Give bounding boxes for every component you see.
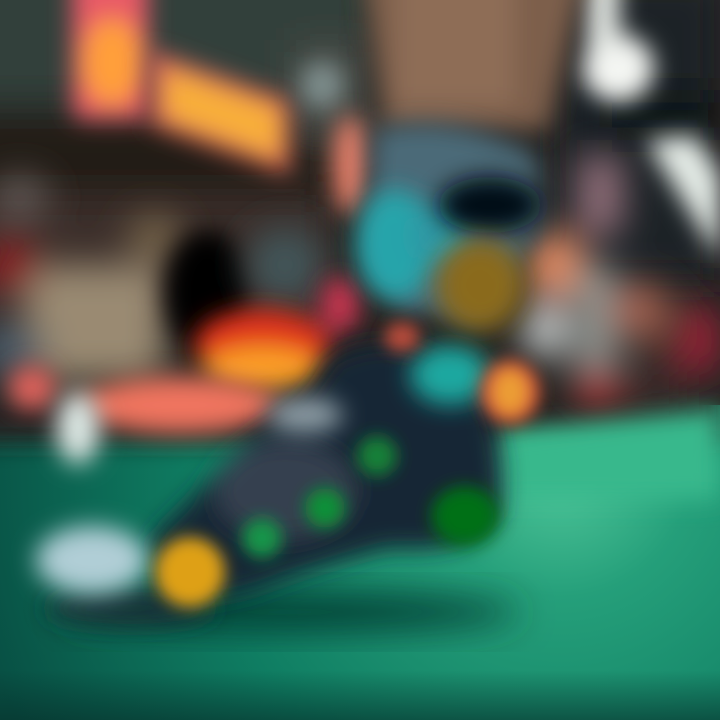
foot: red spot at ankle bbox=[384, 322, 420, 352]
background: white diagonal streak bbox=[645, 135, 720, 260]
sock: ankle and cuff bbox=[371, 124, 545, 320]
floor: shadow beneath foot bbox=[60, 594, 520, 630]
foot: yellow toe spot bbox=[155, 537, 225, 607]
sock: olive gold circle bbox=[436, 239, 524, 331]
background: upper right dark area bbox=[560, 0, 720, 280]
neon sign: yellow orange panel bbox=[150, 50, 290, 175]
background: left items on shelves bbox=[0, 174, 183, 380]
foot: pale blue toe bbox=[36, 526, 148, 594]
background: soft lower edge of shop interior bbox=[0, 0, 720, 442]
background: white light at top right bbox=[582, 0, 654, 102]
sock: pink and orange edge glow bbox=[332, 115, 368, 215]
floor: right side join with background bbox=[495, 408, 720, 500]
background: white bottle at left bbox=[56, 392, 100, 464]
vignette: darkened bottom edge bbox=[0, 670, 720, 720]
background: upper left storefront bbox=[0, 0, 370, 325]
background: pale lamp near the leg bbox=[300, 61, 344, 109]
background: teal gray shape beside black object bbox=[247, 227, 323, 303]
foot: dark area under toe bbox=[45, 592, 215, 624]
background: coral strip bbox=[8, 366, 278, 433]
foot: teal stripe near heel bbox=[410, 345, 490, 405]
foot: pale patch on top bbox=[267, 397, 343, 433]
foot: orange ball at heel bbox=[480, 360, 540, 424]
background: red orange cloth bbox=[194, 277, 360, 390]
foot: green dots bbox=[242, 436, 397, 558]
sock: dark stripe bbox=[438, 177, 542, 233]
leg: bare skin above sock bbox=[362, 0, 585, 130]
background: dark shop interior bbox=[0, 0, 720, 405]
background: black object bbox=[165, 230, 249, 354]
background: right side items bbox=[523, 155, 720, 410]
sock: turquoise panel bbox=[355, 189, 470, 301]
foot: green heel patch bbox=[431, 486, 499, 546]
foot: dark navy body bbox=[150, 345, 502, 610]
neon sign: red and orange panel bbox=[72, 0, 148, 120]
